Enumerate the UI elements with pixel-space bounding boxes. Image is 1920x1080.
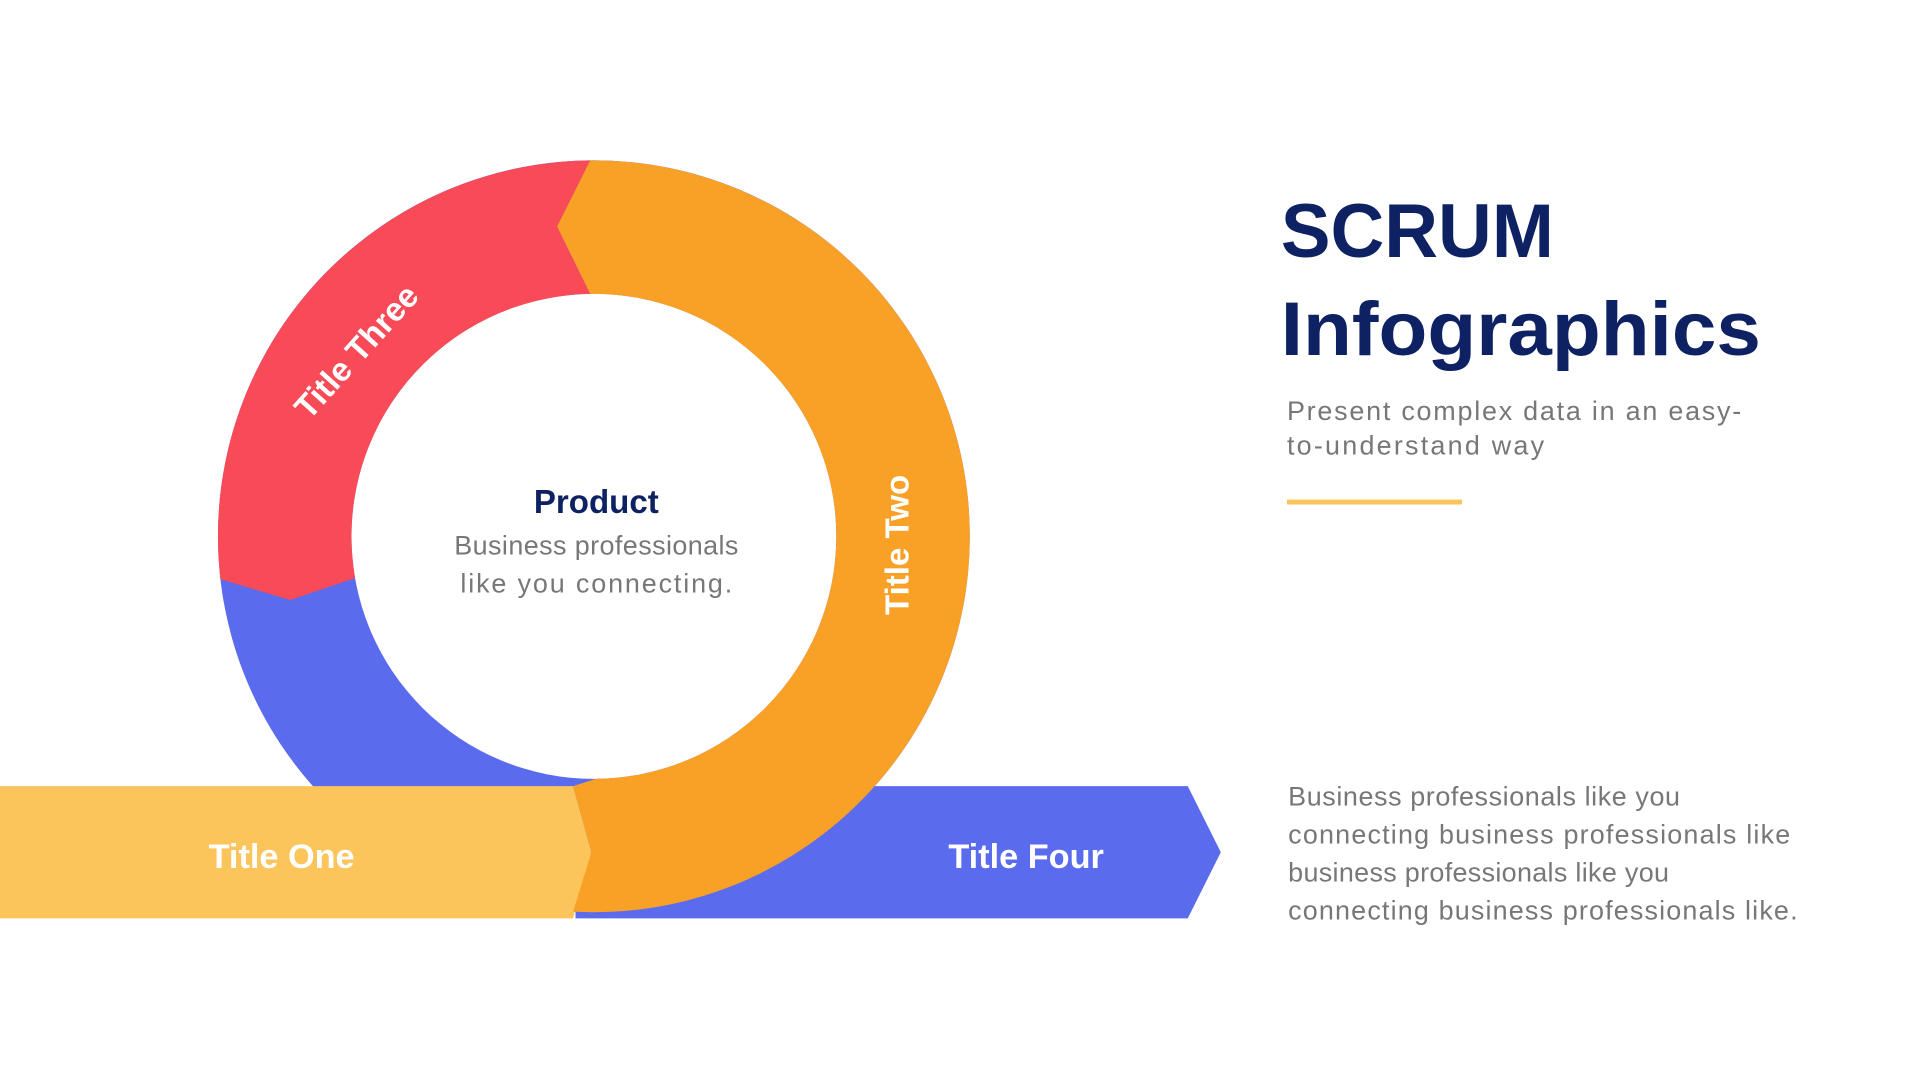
subtitle: to-understand way [1287,430,1545,460]
center text: product: Product [534,484,659,521]
label: title one: Title One [209,838,355,876]
ring segment: orange (title two) [557,160,970,912]
ring segment: blue [218,160,970,912]
arrow bar: title four [576,786,1221,918]
description paragraph: connecting business professionals like. [1288,896,1798,926]
label: title two: Title Two [880,475,917,615]
ring segment: red (title three) [218,160,590,600]
title: Infographics [1281,287,1761,372]
arrow bar: title one [0,786,591,918]
center text: product: like you connecting. [460,569,732,599]
subtitle: Present complex data in an easy- [1287,396,1741,426]
description paragraph: Business professionals like you [1288,782,1680,812]
center text: product: Business professionals [454,531,738,561]
label: title four: Title Four [948,838,1104,876]
title [1281,189,1761,372]
subtitle [1287,396,1741,460]
title: SCRUM [1281,189,1554,274]
description paragraph [1288,782,1798,926]
center text: product [454,484,738,599]
description paragraph: business professionals like you [1288,858,1669,888]
label: title three: Title Three [288,278,426,426]
accent line [1287,500,1462,504]
description paragraph: connecting business professionals like [1288,820,1790,850]
